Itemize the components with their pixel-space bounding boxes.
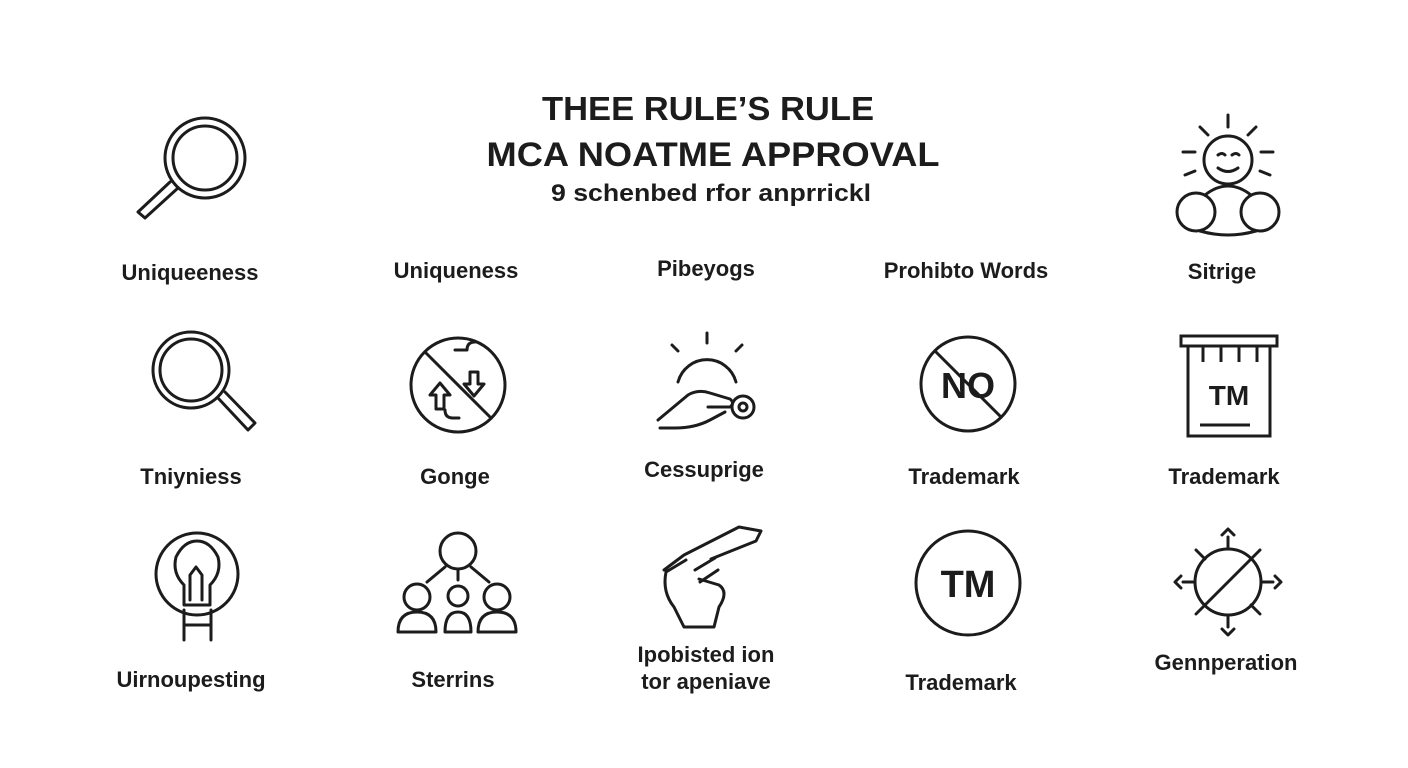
label r1c4: Prohibto Words	[884, 258, 1048, 283]
label r2c1: Tniyniess	[140, 464, 242, 489]
icon: magnifier r1c1	[138, 118, 245, 218]
label r1c1: Uniqueeness	[122, 260, 258, 285]
icon: hand pointing r3c3	[664, 527, 761, 627]
icon: virus no r3c5	[1175, 529, 1281, 635]
label r3c3: tor apeniave	[641, 669, 771, 694]
label r3c5: Gennperation	[1154, 650, 1298, 675]
icon: TM box r2c5: TM	[1209, 380, 1249, 411]
icon: no puzzle r2c2	[411, 338, 505, 432]
icon: sun person r1c5	[1177, 115, 1279, 235]
icon: people network r3c2	[398, 533, 516, 632]
label r3c1: Uirnoupesting	[116, 667, 266, 692]
label r2c3: Cessuprige	[644, 457, 764, 482]
label r3c2: Sterrins	[411, 667, 495, 692]
title block: THEE RULE’S RULE	[542, 90, 874, 127]
icon: TM circle r3c4: TM	[941, 564, 995, 606]
label r1c2: Uniqueness	[394, 258, 518, 283]
label r2c4: Trademark	[908, 464, 1020, 489]
label r2c5: Trademark	[1168, 464, 1280, 489]
icon: hand gear r2c3	[658, 333, 754, 428]
icon: TM box r2c5	[1181, 336, 1277, 436]
label r1c3: Pibeyogs	[657, 256, 755, 281]
icon: TM circle r3c4	[916, 531, 1020, 635]
label r2c2: Gonge	[420, 464, 490, 489]
icon: NO circle r2c4: NO	[941, 365, 995, 406]
title block: 9 schenbed rfor anprrickl	[551, 180, 871, 207]
title block: MCA NOATME APPROVAL	[486, 136, 940, 174]
title block	[486, 90, 940, 207]
label r3c3	[638, 642, 774, 694]
icon: NO circle r2c4	[921, 337, 1015, 431]
label r3c4: Trademark	[905, 670, 1017, 695]
label r3c3: Ipobisted ion	[638, 642, 774, 667]
icon: magnifier r2c1	[153, 332, 255, 430]
icon: bulb r3c1	[156, 533, 238, 640]
label r1c5: Sitrige	[1188, 259, 1256, 284]
